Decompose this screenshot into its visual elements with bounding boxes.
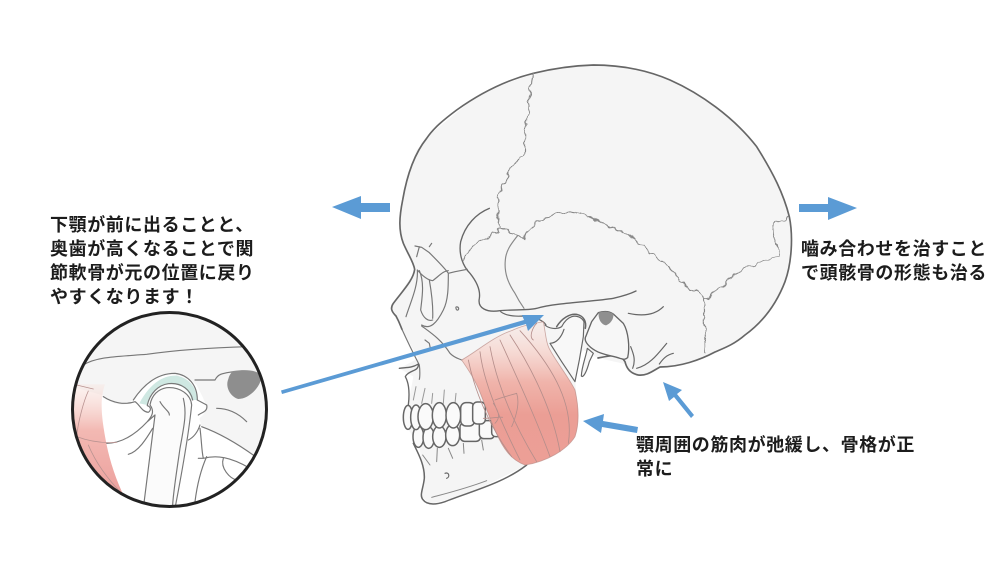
lower inset lines <box>128 398 250 505</box>
maxillary tooth roots <box>413 387 456 403</box>
inset circle: jaw joint close-up <box>71 311 268 508</box>
text: muscle note: 顎周囲の筋肉が弛緩し、骨格が正 <box>636 435 915 455</box>
inset ring <box>72 312 266 506</box>
mental foramen <box>445 473 449 478</box>
sphenoid suture <box>463 228 501 260</box>
text: joint note: 節軟骨が元の位置に戻り <box>50 263 255 283</box>
muscle inner lines <box>77 385 123 495</box>
text: skull note: 嚙み合わせを治すこと <box>801 239 987 259</box>
arrow: skull pushed forward <box>332 196 390 219</box>
masseter muscle <box>462 322 578 465</box>
lower nasal and jaw front <box>399 364 418 405</box>
temporal bone base <box>585 312 629 359</box>
muscle in inset <box>74 384 122 492</box>
coronal suture <box>497 73 533 228</box>
zygomatic and maxilla lines <box>402 326 462 379</box>
text: joint note: 下顎が前に出ることと、 <box>50 215 254 235</box>
arrow: toward mastoid <box>663 382 694 418</box>
arrow: skull pushed back <box>799 197 857 220</box>
temporal line <box>460 208 636 311</box>
grey fossa <box>227 370 262 399</box>
lower outline of fossa <box>103 397 150 412</box>
squamous suture <box>501 212 704 299</box>
skull illustration <box>390 65 791 504</box>
text: joint note: やすくなります！ <box>50 287 199 307</box>
text: skull note: で頭骸骨の形態も治る <box>801 263 987 283</box>
cranium outline <box>392 65 791 375</box>
temporal bone grey area <box>78 314 265 454</box>
muscle fibres <box>468 323 569 462</box>
lambdoid suture <box>704 217 788 299</box>
posterior process <box>194 371 254 456</box>
cranial sutures <box>463 73 788 352</box>
lower teeth <box>413 420 503 448</box>
greater wing of sphenoid <box>505 236 524 308</box>
orbit and nasal lines <box>406 243 467 327</box>
text: joint note: 奥歯が高くなることで関 <box>50 239 254 259</box>
text: joint note <box>50 215 255 307</box>
upper teeth <box>403 402 485 430</box>
ramus of jaw <box>103 388 192 508</box>
infraorbital foramen <box>456 307 459 310</box>
text: skull note <box>801 239 987 283</box>
temporal bone line <box>83 347 247 365</box>
zygomatic arch front <box>501 307 673 368</box>
mandible <box>413 443 527 504</box>
mandibular condyle disc <box>557 314 586 328</box>
text: muscle note: 常に <box>636 459 673 479</box>
articular fossa grey <box>599 312 613 325</box>
skull silhouette <box>390 65 791 504</box>
styloid process <box>581 348 593 376</box>
inset contents <box>74 314 265 505</box>
mandibular ramus and TMJ <box>545 316 584 382</box>
occipital suture <box>704 299 706 352</box>
articular disc <box>139 376 197 405</box>
inset white base <box>60 305 280 515</box>
arrow: inset to joint <box>281 315 544 394</box>
arrow: toward muscle <box>583 414 638 433</box>
text: muscle note <box>636 435 915 479</box>
